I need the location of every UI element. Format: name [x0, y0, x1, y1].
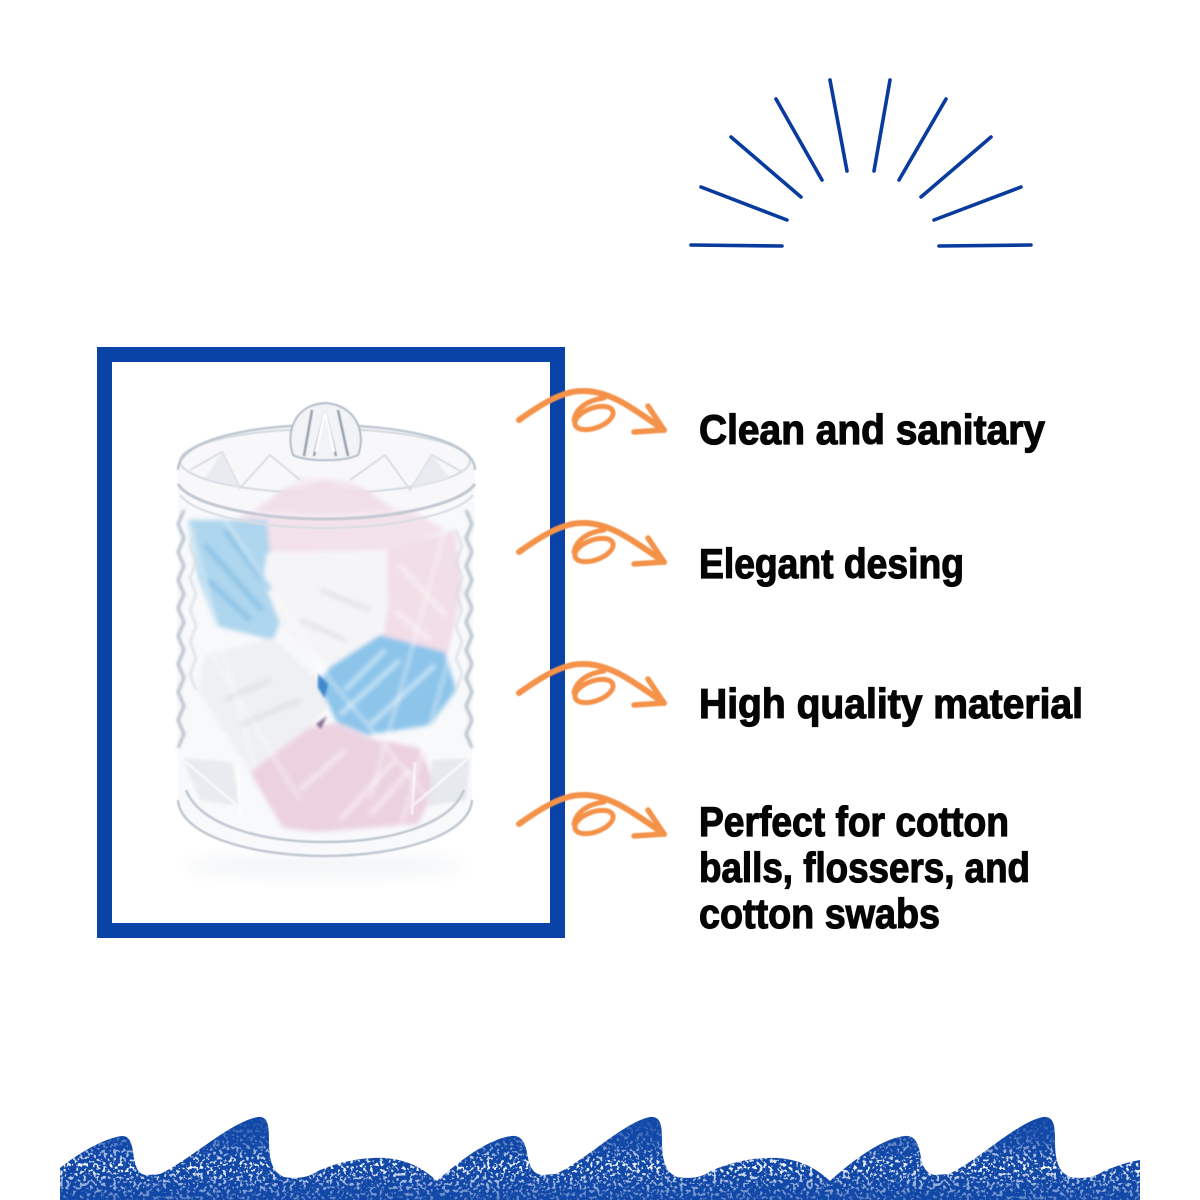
jar body — [177, 425, 475, 856]
ball texture — [205, 530, 445, 820]
jar lid — [178, 425, 475, 528]
panel: blue product frame — [104, 354, 558, 930]
text block: perfect for cotton balls — [699, 798, 1030, 937]
crevice between balls — [318, 674, 328, 698]
base facets — [184, 758, 238, 805]
arrow: elegant design — [519, 523, 664, 566]
cotton balls — [180, 477, 470, 832]
arrow: clean and sanitary — [519, 391, 664, 434]
lid diamond cuts — [190, 452, 462, 490]
product photo: acrylic jar with cotton balls — [177, 403, 475, 878]
arrow: perfect for cotton balls — [519, 795, 664, 838]
decorative speckled blue waves — [60, 1110, 1140, 1200]
diagonal acrylic facets — [185, 520, 460, 830]
jar base rim — [178, 790, 472, 856]
text block: perfect for cotton balls: Perfect for cotton — [699, 798, 1009, 845]
text: clean and sanitary: Clean and sanitary — [699, 406, 1046, 453]
jar floor shadow — [185, 854, 465, 878]
text block: perfect for cotton balls: balls, flossers, and — [699, 844, 1030, 891]
text: high quality material: High quality material — [699, 680, 1083, 727]
text: elegant desing: Elegant desing — [699, 540, 964, 587]
jar knob — [290, 403, 361, 460]
icon: sunburst rays — [691, 80, 1031, 246]
text block: perfect for cotton balls: cotton swabs — [699, 890, 940, 937]
jar side scallops — [178, 510, 472, 748]
arrow: high quality material — [519, 664, 664, 707]
